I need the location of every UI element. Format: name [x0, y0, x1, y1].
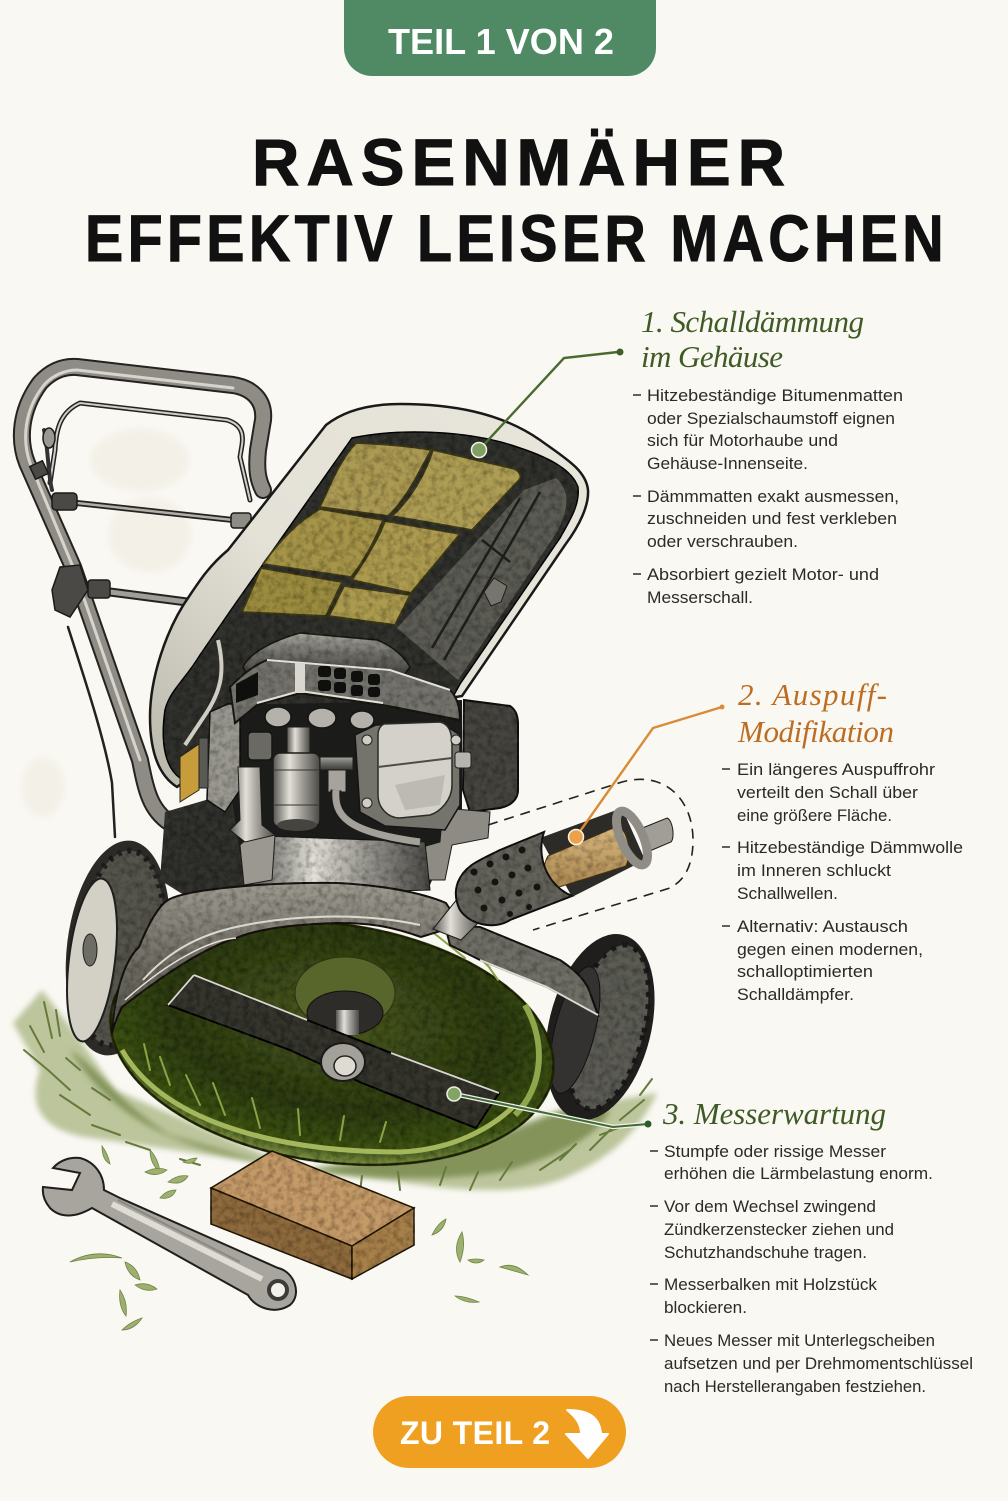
exhaust pipe: [433, 898, 483, 940]
section 2 text: schalloptimierten: [737, 963, 873, 981]
callout line 1: [472, 348, 624, 458]
side padding: [397, 478, 566, 680]
handle clamps: [30, 428, 251, 617]
section 1 text: zuschneiden und fest verkleben: [647, 510, 897, 528]
insulation tiles: [242, 443, 521, 625]
section 2 text: gegen einen modernen,: [737, 941, 923, 959]
section 1 heading: [641, 304, 864, 374]
lower-left dark parts: [160, 790, 262, 905]
carburetor cylinder: [287, 727, 310, 757]
section 3 text: Vor dem Wechsel zwingend: [664, 1198, 876, 1216]
air filter cover: [378, 722, 452, 818]
inner wire frame: [50, 403, 250, 500]
section 1 heading: 1. Schalldämmung: [641, 304, 864, 339]
engine: [160, 633, 518, 905]
hood outer shell: [150, 404, 588, 787]
section 2 heading: [737, 677, 894, 749]
section 2 text: Ein längeres Auspuffrohr: [737, 761, 936, 779]
wrench: [43, 1158, 296, 1310]
button: next part: [373, 1396, 626, 1468]
right brackets: [412, 808, 490, 880]
left column: [230, 767, 275, 842]
section 1 heading: im Gehäuse: [641, 339, 783, 374]
end shaft: [640, 818, 673, 853]
spindle cup: [295, 957, 395, 1029]
icon: down arrow: [566, 1410, 608, 1458]
grass patch: [13, 990, 657, 1192]
warning label: [180, 744, 199, 802]
section 3 text: blockieren.: [664, 1299, 747, 1317]
pipe: [336, 790, 420, 842]
dashed outline: [488, 779, 693, 930]
cut-away interior: [540, 808, 645, 897]
wood block: [211, 1151, 414, 1279]
main tube outline: [22, 367, 263, 823]
handle bars: [22, 367, 263, 837]
section 3 text: Schutzhandschuhe tragen.: [664, 1244, 867, 1262]
section 1 text: [633, 387, 903, 607]
header tab: part label: [344, 0, 656, 76]
engine dark core: [232, 700, 462, 885]
section 2 text: verteilt den Schall über: [737, 784, 919, 802]
section 2 text: eine größere Fläche.: [737, 807, 892, 825]
section 2 text: Hitzebeständige Dämmwolle: [737, 839, 963, 857]
watercolor stains: [21, 428, 192, 817]
section 3 text: erhöhen die Lärmbelastung enorm.: [664, 1165, 933, 1183]
title: RASENMÄHER: [252, 125, 792, 199]
section 1 text: Dämmmatten exakt ausmessen,: [647, 488, 899, 506]
bolts: [248, 707, 374, 760]
air filter plate: [355, 722, 460, 830]
grass clippings: [70, 1146, 528, 1330]
section 1 text: Hitzebeständige Bitumenmatten: [647, 387, 903, 405]
section 3 heading: 3. Messerwartung: [662, 1096, 886, 1131]
hood with insulation: [150, 404, 588, 787]
vent holes: [236, 666, 380, 703]
mower blade: [168, 975, 499, 1128]
callout line 2: [568, 704, 724, 844]
blower housing main: [230, 660, 460, 723]
hood dark interior: [163, 432, 578, 778]
section 2 text: Alternativ: Austausch: [737, 918, 908, 936]
section 3 text: aufsetzen und per Drehmomentschlüssel: [664, 1355, 973, 1373]
deck: [95, 883, 598, 1192]
illustration: lawn mower: [13, 367, 693, 1330]
title: [85, 125, 948, 275]
hood latch: [185, 640, 222, 745]
perforated can: [456, 832, 572, 925]
section 1 text: Messerschall.: [647, 589, 753, 607]
section 3 text: Stumpfe oder rissige Messer: [664, 1143, 887, 1161]
crankcase: [250, 836, 430, 895]
wool: [544, 826, 629, 888]
section 3 text: [650, 1143, 973, 1396]
header tab: part label: TEIL 1 VON 2: [388, 21, 614, 62]
section 1 text: Absorbiert gezielt Motor- und: [647, 566, 879, 584]
button: next part: ZU TEIL 2: [400, 1415, 550, 1451]
section 2 text: Schalldämpfer.: [737, 986, 854, 1004]
deck opening: [95, 894, 569, 1192]
section 3 text: nach Herstellerangaben festziehen.: [664, 1378, 926, 1396]
main tube body: [22, 367, 263, 823]
cross bars: [77, 503, 233, 520]
section 1 text: oder Spezialschaumstoff eignen: [647, 410, 895, 428]
section 2 heading: Modifikation: [737, 714, 894, 749]
deck side shell: [112, 883, 460, 1033]
blower housing top: [243, 633, 410, 680]
cable: [68, 627, 115, 837]
section 3 text: Zündkerzenstecker ziehen und: [664, 1221, 894, 1239]
section 2 text: Schallwellen.: [737, 885, 838, 903]
callout line 3: [447, 1087, 652, 1128]
rim: [610, 807, 654, 869]
lower housing: [240, 825, 275, 885]
section 1 text: oder verschrauben.: [647, 533, 798, 551]
section 2 heading: 2. Auspuff-: [738, 677, 887, 712]
engine side panel: [207, 704, 240, 812]
muffler detail: [433, 779, 693, 940]
section 1 text: sich für Motorhaube und: [647, 432, 838, 450]
section 3 text: Neues Messer mit Unterlegscheiben: [664, 1332, 935, 1350]
section 1 text: Gehäuse-Innenseite.: [647, 455, 808, 473]
black side box: [463, 700, 518, 812]
section 2 text: im Inneren schluckt: [737, 862, 891, 880]
rear right wheel: [528, 922, 672, 1132]
rear left wheel: [54, 835, 182, 1061]
section 3 text: Messerbalken mit Holzstück: [664, 1276, 878, 1294]
section 2 text: [722, 761, 963, 1004]
right fender: [445, 925, 598, 1015]
